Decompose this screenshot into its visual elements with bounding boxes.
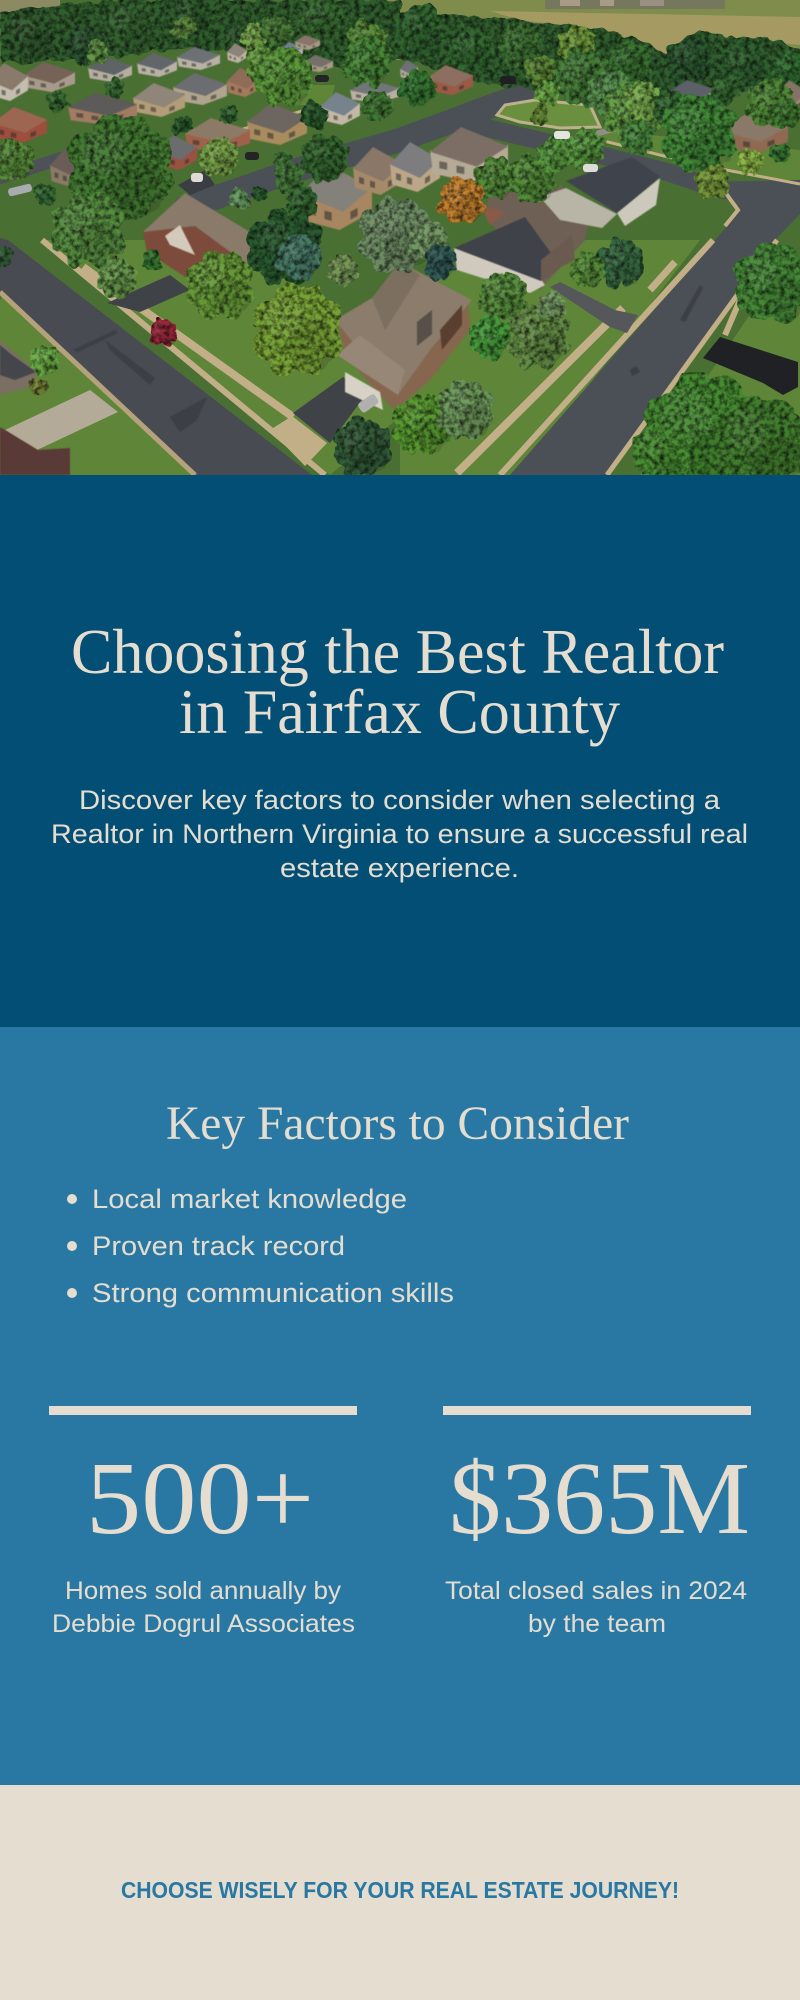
road patches (73, 285, 703, 432)
stat: homes sold (49, 1406, 357, 1638)
intro text: Realtor in Northern Virginia to ensure a successful real (51, 819, 748, 849)
upper roads (0, 93, 800, 208)
hero photo: aerial view of suburban neighborhood (0, 0, 800, 496)
field: top right pasture (0, 0, 800, 60)
title: Choosing the Best Realtor (71, 617, 724, 687)
bullet list (67, 1184, 454, 1308)
stat: homes sold: Debbie Dogrul Associates (52, 1610, 355, 1638)
house: gray with dark roof (540, 157, 660, 228)
house: bottom left (0, 340, 70, 475)
right road (510, 180, 800, 475)
heading: key factors: Key Factors to Consider (166, 1097, 629, 1150)
curbs and sidewalks (0, 110, 800, 475)
bullet list: Proven track record (92, 1231, 345, 1261)
stat: homes sold: 500+ (86, 1441, 314, 1556)
house: white with dark roof (454, 185, 592, 293)
lawns (0, 85, 800, 475)
cars (7, 75, 598, 414)
call to action: CHOOSE WISELY FOR YOUR REAL ESTATE JOURNEY! (121, 1877, 679, 1903)
stat: closed sales: Total closed sales in 2024 (445, 1577, 747, 1605)
intro text (51, 785, 748, 883)
forest band (0, 0, 800, 95)
stat: closed sales: by the team (528, 1610, 666, 1638)
title: in Fairfax County (179, 677, 620, 747)
trees (0, 15, 800, 496)
stat: closed sales: $365M (449, 1441, 750, 1556)
stat: closed sales (443, 1406, 751, 1638)
stat: homes sold: Homes sold annually by (65, 1577, 342, 1605)
driveways and concrete (5, 170, 798, 450)
bullet list: Strong communication skills (92, 1278, 454, 1308)
left road (0, 238, 312, 475)
intro text: estate experience. (280, 853, 519, 883)
house: brown roof left (143, 193, 260, 280)
panel: title section (0, 475, 800, 1027)
houses: upper neighborhood (0, 35, 800, 187)
curved lawn island (497, 100, 600, 128)
houses: center row (300, 127, 508, 230)
bullet list: Local market knowledge (92, 1184, 407, 1214)
intro text: Discover key factors to consider when selecting a (79, 785, 721, 815)
house: large brick foreground (335, 262, 472, 410)
title (71, 617, 724, 747)
panel: footer (0, 1785, 800, 2000)
panel: key factors and statistics (0, 1027, 800, 1785)
